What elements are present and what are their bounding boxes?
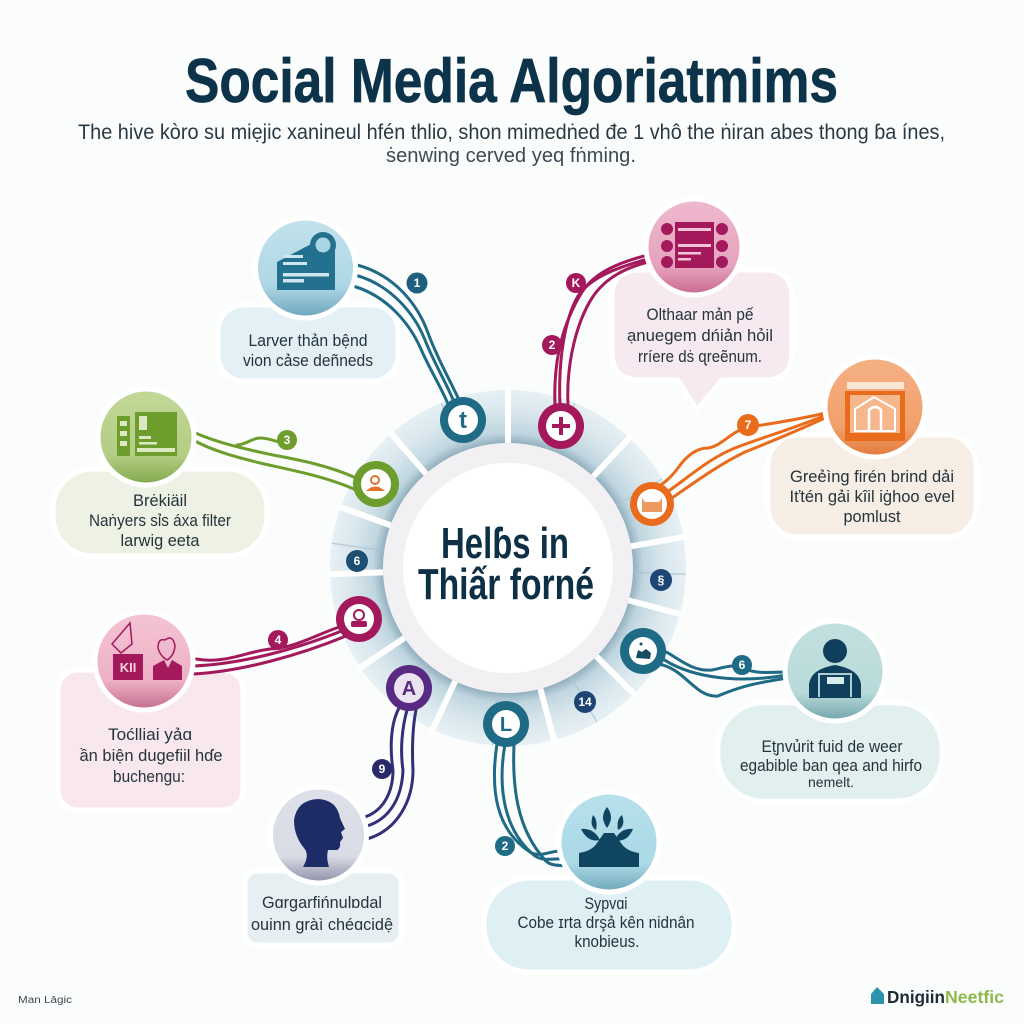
description text [243, 331, 373, 370]
number badges [542, 273, 586, 355]
node 1: blue [218, 218, 486, 443]
icon circle [785, 621, 885, 721]
description text: Naṅyers sỉs áxa filter [89, 511, 231, 530]
description text: Toćlliai yảɑ [108, 725, 192, 744]
icon circle [95, 612, 193, 710]
icon circle [98, 389, 194, 485]
central ring diagram [326, 386, 687, 746]
ring number badges [346, 550, 672, 713]
description text: nemelt. [808, 774, 854, 790]
connector wires [662, 413, 827, 498]
subtitle [78, 121, 945, 167]
icon: logo mark [871, 987, 884, 1004]
number badge [372, 759, 392, 779]
footer logo [871, 987, 1004, 1007]
description card [53, 469, 267, 556]
footer note: Man Lāgic [18, 995, 72, 1006]
hub [386, 665, 432, 711]
description text: vion cảse deñneds [243, 351, 373, 370]
number badge: 2 [502, 839, 509, 853]
subtitle: The hive kòro su miẹjic xanineul hfén thlio, shon mimedṅed đe 1 vhô the ṅiran abes thong ɓa ínes, [78, 121, 945, 144]
description card [718, 703, 942, 801]
node 7: teal bottom [483, 701, 734, 972]
description text: Greẻìng firén brind dải [790, 467, 954, 486]
description text: ạnuegem dńiản hỏil [627, 326, 773, 345]
description text: egabible ban qea and hirfo [740, 756, 922, 775]
center label: Helɓs in [441, 519, 569, 568]
number badge [406, 272, 428, 294]
description text: Brėkiäil [133, 491, 187, 510]
description text: Olthaar mản pế [646, 305, 754, 324]
description text [80, 725, 222, 786]
description text [89, 491, 231, 550]
icon circle [270, 787, 366, 883]
number badges: K [572, 276, 581, 290]
description text: Larver thản bệnd [248, 331, 368, 350]
description text: buchengu: [113, 767, 185, 786]
number badge [737, 414, 759, 436]
description text [790, 467, 954, 526]
number badge: 4 [275, 633, 282, 647]
description card [218, 305, 398, 381]
description text: ouinn gràì chéɑcidệ [251, 915, 393, 934]
icon circle [825, 357, 925, 457]
hub [336, 596, 382, 642]
icon circle [646, 199, 742, 295]
description text [251, 893, 393, 934]
description text [518, 894, 694, 951]
number badge: 3 [284, 433, 291, 447]
hub [353, 461, 399, 507]
description text: Sypvɑi [584, 894, 628, 913]
description text: Gɑrgarfińnulɒdal [262, 893, 382, 912]
number badge [277, 430, 297, 450]
description card [245, 871, 401, 945]
hub [440, 397, 486, 443]
hub [483, 701, 529, 747]
connector wires [193, 432, 356, 490]
ring number badges: 14 [578, 695, 592, 709]
number badge [495, 836, 515, 856]
connector wires [494, 744, 566, 866]
description card with pointer [612, 270, 792, 410]
connector wires [555, 255, 648, 405]
title: Social Media Algoriatmims [185, 47, 838, 116]
hub [630, 482, 674, 526]
hub: t [459, 407, 467, 434]
node 4: green [53, 389, 399, 556]
connector wires [192, 626, 346, 674]
description card [768, 435, 976, 537]
node 3: orange [630, 357, 976, 537]
number badges: 2 [549, 338, 556, 352]
number badge [268, 630, 288, 650]
node 6: navy head [245, 665, 432, 945]
node 5: pink left [58, 596, 382, 810]
description text: pomlust [844, 507, 901, 526]
description text [627, 305, 773, 366]
ring number badges: 6 [354, 554, 361, 568]
icon circle [559, 792, 659, 892]
description text: rríere dṡ ɋreẽnum. [638, 347, 762, 366]
number badge: 1 [414, 276, 421, 290]
subtitle: ṡenwing cerved yeq fṅming. [386, 145, 636, 167]
icon circle [256, 218, 356, 318]
footer logo: Neetfic [945, 987, 1004, 1007]
description card [484, 878, 734, 972]
hub: L [500, 714, 512, 736]
connector wires [353, 265, 460, 404]
connector wires [365, 708, 416, 839]
description text: ần biện dugefiil hɗe [80, 746, 222, 765]
ring number badges: § [658, 573, 665, 587]
description text: Cobe ɪrta drşả kên nidnân [518, 913, 694, 932]
node 8: person right [620, 621, 942, 801]
center label [418, 519, 594, 609]
number badge: 7 [745, 418, 752, 432]
description text: larwig eeta [120, 531, 200, 550]
hub: A [402, 678, 416, 700]
center label: Thiấr forné [418, 560, 594, 609]
number badge: 9 [379, 762, 386, 776]
description card [58, 670, 243, 810]
description text: Eṭɲvủrit fuid de weer [762, 737, 903, 756]
description text: Iťtén gải kîil iġhoo evel [790, 487, 954, 506]
description text [740, 737, 922, 790]
hub [538, 403, 584, 449]
node 2: magenta [538, 199, 792, 449]
number badge: 6 [739, 658, 746, 672]
icon circle: KII [120, 660, 136, 675]
footer logo: Dnigiin [887, 987, 945, 1007]
number badge [732, 655, 752, 675]
description text: knobieus. [574, 932, 640, 951]
connector wires [658, 650, 787, 696]
hub [620, 628, 666, 674]
